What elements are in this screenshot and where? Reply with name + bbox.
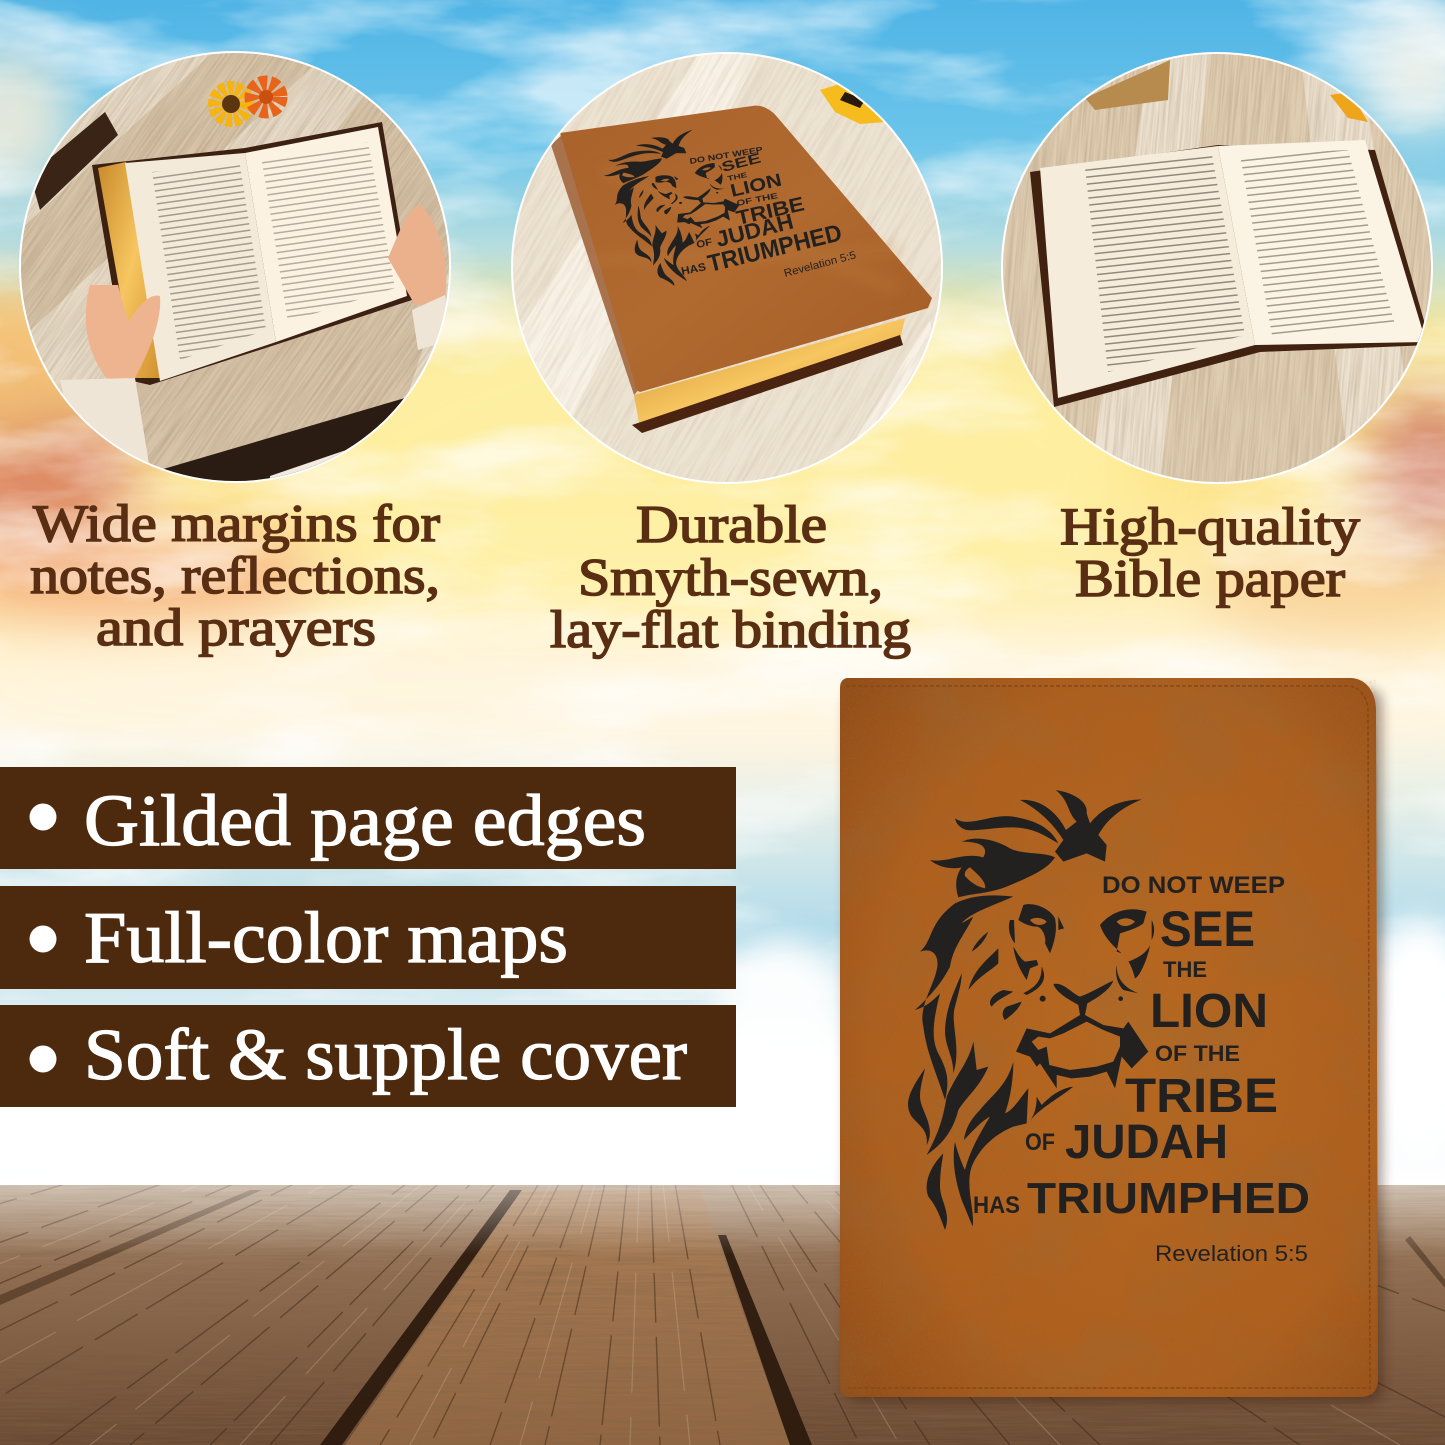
- cover verse: [973, 872, 1310, 1223]
- page block: [634, 318, 905, 428]
- cover verse: TRIBE: [1125, 1070, 1278, 1123]
- cover stamp: SEE: [720, 149, 762, 175]
- burlap: [1085, 60, 1170, 110]
- hands: [86, 285, 160, 380]
- cover stamp: OF THE: [736, 191, 780, 208]
- cover stamp: OF: [695, 237, 713, 251]
- cover stamp: TRIUMPHED: [705, 219, 845, 278]
- feature bar: full-color maps: [0, 886, 736, 989]
- right page: [1218, 140, 1426, 345]
- cover verse: LION: [1150, 985, 1268, 1038]
- tabletop planks: [21, 53, 449, 481]
- feature bar: soft cover: Soft & supple cover: [84, 1014, 687, 1095]
- plank grain: [0, 1185, 1445, 1445]
- feature bar: gilded page edges: [0, 767, 736, 869]
- spine: [551, 132, 638, 395]
- flower: [820, 82, 885, 124]
- caption: binding: Durable: [636, 496, 827, 554]
- cover stamp: [604, 130, 856, 286]
- sweater sleeves: [60, 378, 150, 470]
- cover verse: SEE: [1160, 901, 1255, 957]
- right page: [245, 127, 407, 342]
- wooden deck: [0, 1185, 1445, 1445]
- cover stamp: THE: [727, 172, 748, 183]
- cover verse: TRIUMPHED: [1027, 1174, 1310, 1223]
- cover verse: JUDAH: [1065, 1116, 1228, 1169]
- caption: wide margins: notes, reflections,: [30, 547, 440, 605]
- main plank gaps: [320, 1190, 812, 1445]
- caption: binding: Smyth-sewn,: [578, 549, 883, 607]
- pen case: [30, 112, 118, 210]
- caption: paper: Bible paper: [1075, 550, 1345, 608]
- lion stamp: [908, 790, 1154, 1230]
- cover stamp: LION: [728, 170, 784, 201]
- feature bar: full-color maps: Full-color maps: [84, 897, 568, 978]
- caption: wide margins: Wide margins for: [33, 495, 440, 553]
- photo circle: open Bible with hands: [19, 51, 451, 483]
- cover stamp: TRIBE: [734, 193, 806, 230]
- caption: wide margins: [30, 495, 440, 657]
- caption: wide margins: and prayers: [96, 599, 376, 657]
- cover stamp: DO NOT WEEP: [689, 145, 764, 166]
- feature bar: gilded page edges: Gilded page edges: [84, 780, 646, 861]
- cover stamp: JUDAH: [713, 209, 796, 252]
- cover verse: DO NOT WEEP: [1102, 872, 1285, 899]
- cover stamp: HAS: [680, 261, 707, 278]
- photo circle: closed leather Bible: [511, 52, 943, 484]
- photo circle: open Bible pages: [1001, 52, 1433, 484]
- caption: binding: lay-flat binding: [550, 601, 911, 659]
- feature bar: soft cover: [0, 1005, 736, 1107]
- sunflower: [215, 83, 280, 120]
- cover verse: OF THE: [1155, 1041, 1240, 1066]
- gilded edge: [98, 162, 162, 378]
- cover verse: OF: [1025, 1129, 1055, 1156]
- caption: binding: [550, 496, 911, 659]
- cover verse: THE: [1163, 957, 1207, 982]
- flower: [1330, 92, 1368, 122]
- cover stamp: Revelation 5:5: [783, 249, 857, 280]
- book cover: [92, 122, 412, 385]
- leather Bible cover: [840, 678, 1382, 1402]
- left page: [125, 153, 276, 381]
- left page: [1040, 146, 1255, 398]
- cover verse: HAS: [973, 1192, 1020, 1219]
- caption: paper: High-quality: [1060, 498, 1361, 556]
- book cover: [1030, 145, 1431, 407]
- scripture reference: Revelation 5:5: [1155, 1241, 1308, 1266]
- caption: paper: [1060, 498, 1361, 608]
- cover: [560, 106, 932, 392]
- dark table edge: [164, 398, 404, 481]
